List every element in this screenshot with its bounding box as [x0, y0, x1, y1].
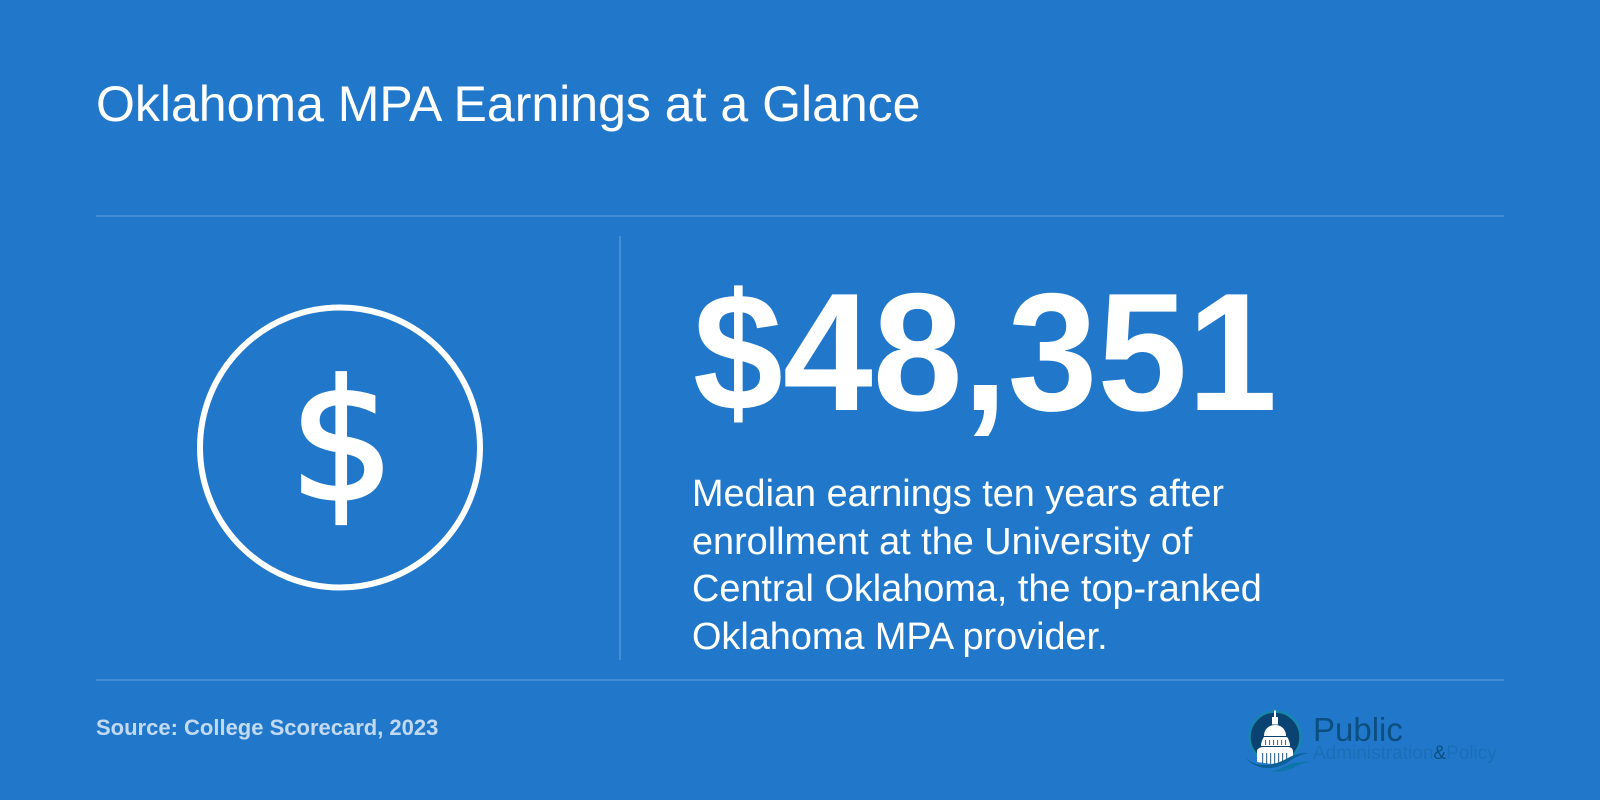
- logo wordmark: Administration & Policy: Administration&Policy: [1313, 743, 1497, 764]
- icon: dollar sign in circle: $: [289, 346, 395, 539]
- source note: Source: College Scorecard, 2023: [96, 715, 438, 740]
- description: enrollment at the University of: [692, 520, 1192, 562]
- icon: dollar sign in circle: [197, 304, 483, 590]
- icon: capitol dome: [1246, 710, 1312, 772]
- description: Oklahoma MPA provider.: [692, 616, 1108, 658]
- description: Median earnings ten years after: [692, 473, 1224, 515]
- description: Central Oklahoma, the top-ranked: [692, 568, 1262, 610]
- big number: $48,351: [693, 258, 1277, 446]
- title: Oklahoma MPA Earnings at a Glance: [96, 76, 920, 132]
- logo wordmark: Public: Public: [1313, 711, 1403, 748]
- description: [692, 473, 1262, 658]
- logo: Public Administration & Policy: [1246, 710, 1497, 772]
